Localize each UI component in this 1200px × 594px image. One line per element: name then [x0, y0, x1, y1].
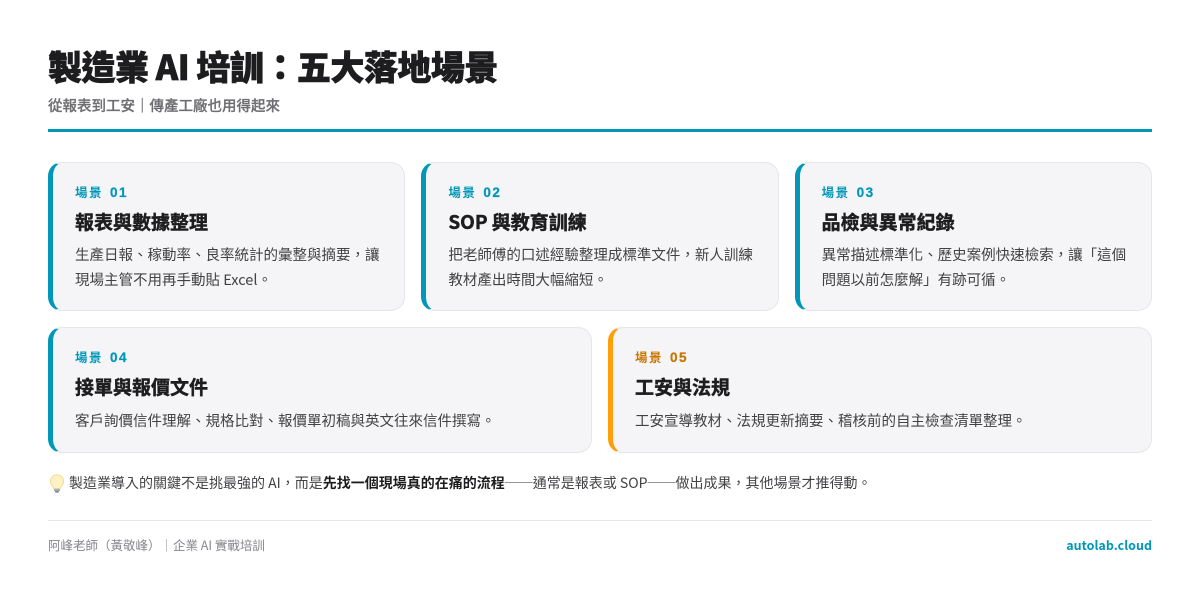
heading: scenario 03: 品檢與異常紀錄 — [822, 208, 955, 235]
callout: key takeaway: 製造業導入的關鍵不是挑最強的 AI，而是先找一個現場真的在痛的流程──通常是報表或 SOP──做出成果，其他場景才推得動。 — [69, 473, 871, 493]
heading: scenario 05: 工安與法規 — [635, 373, 730, 400]
panel: scenario 05 — [608, 327, 1152, 453]
footer rule — [48, 520, 1152, 521]
text: scenario 03: 問題以前怎麼解」有跡可循。 — [822, 268, 1010, 290]
text: scenario 04: 客戶詢價信件理解、規格比對、報價單初稿與英文往來信件撰寫。 — [75, 410, 496, 431]
footer: website: autolab.cloud — [1066, 535, 1152, 554]
text: scenario 01: 生產日報、稼動率、良率統計的彙整與摘要，讓 — [75, 244, 380, 264]
title: 製造業 AI 培訓：五大落地場景 — [48, 41, 498, 90]
heading: scenario 02: SOP 與教育訓練 — [448, 208, 587, 235]
label: scenario 02: 場景 02 — [448, 185, 501, 200]
text: scenario 05: 工安宣導教材、法規更新摘要、稽核前的自主檢查清單整理。 — [635, 410, 1026, 431]
label: scenario 04: 場景 04 — [75, 350, 128, 365]
label: scenario 05: 場景 05 — [635, 350, 688, 365]
text: scenario 01 — [75, 244, 380, 290]
text: scenario 02 — [448, 244, 753, 290]
heading: scenario 04: 接單與報價文件 — [75, 373, 208, 400]
header rule — [48, 129, 1152, 132]
panel: scenario 01 — [48, 162, 405, 311]
icon: light bulb — [50, 474, 64, 493]
heading: scenario 01: 報表與數據整理 — [75, 208, 208, 235]
label: scenario 03: 場景 03 — [822, 185, 875, 200]
panel: scenario 03 — [795, 162, 1152, 311]
footer: author: 阿峰老師（黃敬峰）｜企業 AI 實戰培訓 — [48, 535, 265, 554]
text: scenario 03 — [822, 244, 1126, 290]
text: scenario 03: 異常描述標準化、歷史案例快速檢索，讓「這個 — [822, 244, 1126, 264]
text: scenario 01: 現場主管不用再手動貼 Excel。 — [75, 268, 272, 290]
subtitle: 從報表到工安｜傳產工廠也用得起來 — [48, 95, 280, 116]
text: scenario 02: 把老師傅的口述經驗整理成標準文件，新人訓練 — [448, 244, 753, 264]
text: scenario 02: 教材產出時間大幅縮短。 — [448, 268, 608, 290]
panel: scenario 04 — [48, 327, 592, 453]
panel: scenario 02 — [421, 162, 779, 311]
label: scenario 01: 場景 01 — [75, 185, 128, 200]
